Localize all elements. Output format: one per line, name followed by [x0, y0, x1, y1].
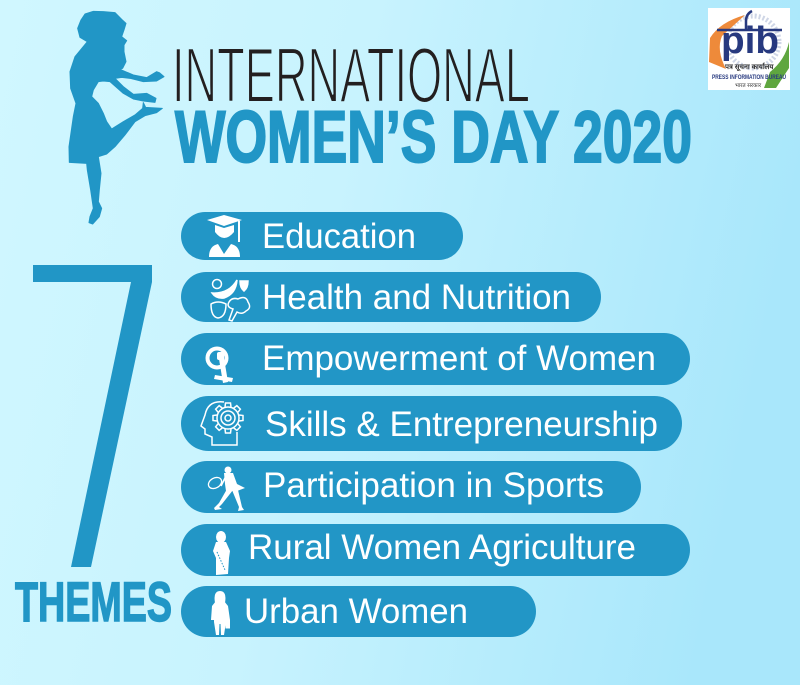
icon: woman silhouette [69, 11, 164, 224]
logo: hindi government: भारत सरकार [735, 83, 762, 89]
title: International: INTERNATIONAL [172, 31, 530, 119]
bar: health and nutrition [181, 272, 601, 322]
label: themes: THEMES [15, 570, 172, 633]
icon: tennis player [206, 466, 245, 511]
icon: businesswoman [211, 591, 230, 635]
logo: pib letters: pib [721, 20, 779, 62]
text: skills and entrepreneurship: Skills & Entrepreneurship [265, 405, 658, 444]
text: education: Education [262, 217, 416, 256]
bar: rural women agriculture [181, 524, 690, 576]
text: empowerment of women: Empowerment of Women [262, 339, 656, 378]
bar: empowerment of women [181, 333, 690, 385]
icon: head with gear [201, 402, 243, 445]
logo: top bar and stem [717, 11, 782, 30]
logo: chakra [727, 16, 779, 68]
logo: orange sweep [709, 15, 745, 69]
icon: woman in saree [213, 531, 230, 575]
icon: female fist symbol [208, 348, 233, 383]
bar: skills and entrepreneurship [181, 396, 682, 451]
text: urban women: Urban Women [244, 592, 468, 631]
bar: urban women [181, 586, 536, 637]
logo: Press Information Bureau [708, 8, 790, 90]
numeral 7 [33, 265, 152, 567]
bar: education [181, 212, 463, 260]
logo: green sweep [764, 42, 789, 88]
icon: graduate [207, 215, 242, 257]
text: rural women agriculture: Rural Women Agriculture [248, 528, 636, 567]
icon: fruit and vegetables [211, 280, 250, 321]
logo: hindi name: पत्र सूचना कार्यालय [724, 62, 774, 72]
text: health and nutrition: Health and Nutrition [262, 278, 571, 317]
text: participation in sports: Participation in Sports [263, 466, 604, 505]
bar: participation in sports [181, 461, 641, 513]
